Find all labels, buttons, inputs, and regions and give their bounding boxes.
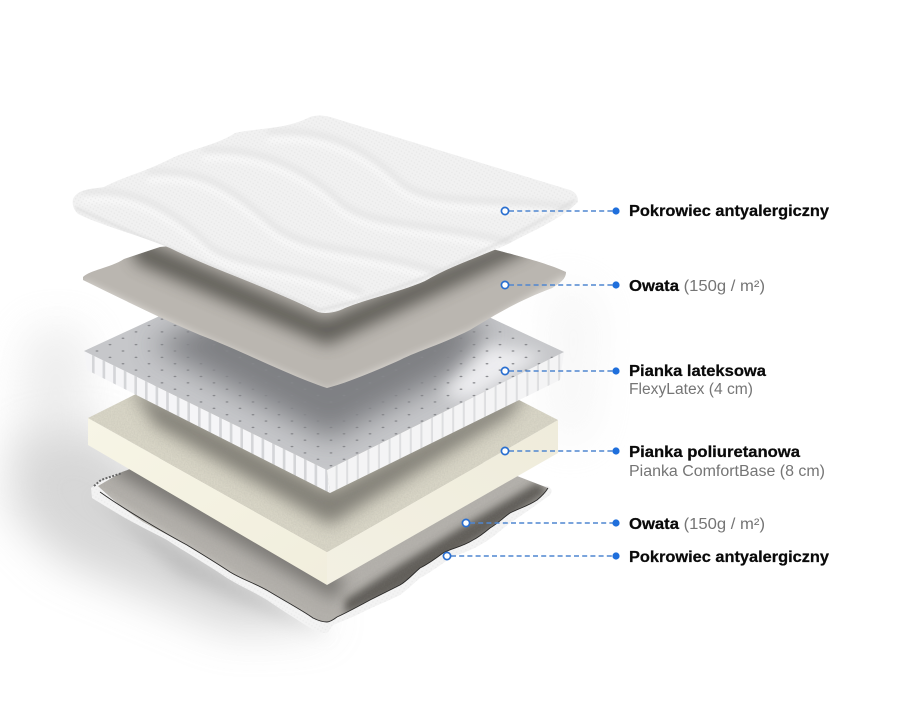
callout: polyurethane foam bbox=[501, 444, 825, 480]
cover waves bbox=[359, 250, 495, 303]
callout: latex foam bbox=[501, 363, 766, 398]
callout: polyurethane foam: Pianka ComfortBase (8 cm) bbox=[629, 463, 825, 480]
callout: bottom wadding: Owata (150g / m²) bbox=[629, 516, 765, 533]
layer: bottom cover bbox=[91, 458, 552, 633]
callout: top cover bbox=[501, 203, 829, 220]
callout: top wadding bbox=[501, 278, 765, 295]
layer: top wadding bbox=[83, 246, 566, 388]
stitching tag bbox=[94, 473, 122, 486]
callout: bottom wadding bbox=[462, 516, 765, 533]
layer: bottom wadding bbox=[98, 458, 548, 622]
layer: latex foam bbox=[84, 316, 564, 493]
layer: polyurethane foam bbox=[88, 385, 558, 585]
callout: latex foam: FlexyLatex (4 cm) bbox=[629, 381, 753, 398]
layer: top cover bbox=[73, 116, 578, 313]
callout: polyurethane foam: Pianka poliuretanowa bbox=[629, 444, 800, 461]
latex ribs bbox=[84, 351, 564, 493]
callout: bottom cover bbox=[443, 549, 829, 566]
drop shadows bbox=[10, 280, 600, 640]
callout: top wadding: Owata (150g / m²) bbox=[629, 278, 765, 295]
callout: latex foam: Pianka lateksowa bbox=[629, 363, 766, 380]
callout: bottom cover: Pokrowiec antyalergiczny bbox=[629, 549, 829, 566]
callout: top cover: Pokrowiec antyalergiczny bbox=[629, 203, 829, 220]
